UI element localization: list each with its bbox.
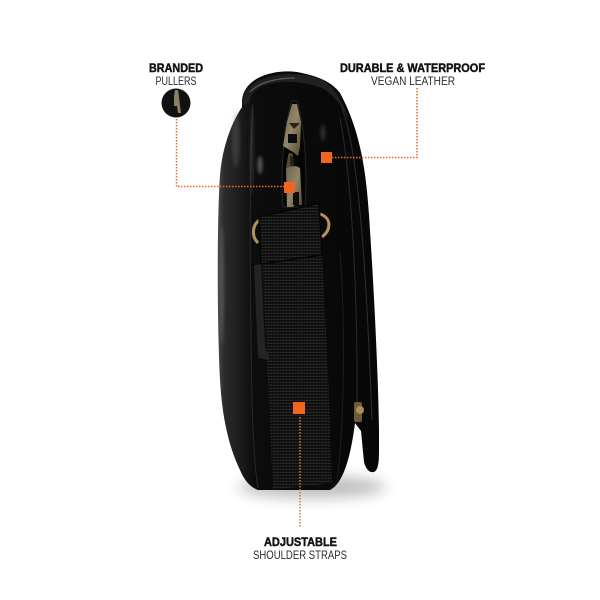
right D-ring	[320, 214, 329, 237]
zipper slot	[282, 101, 306, 207]
bag body silhouette	[218, 71, 379, 490]
strap main webbing	[262, 255, 332, 490]
ground shadow	[238, 476, 386, 498]
connector line	[331, 88, 417, 158]
body seams	[250, 105, 372, 488]
callout: branded pullers	[149, 61, 295, 193]
strap frayed highlight	[254, 264, 269, 360]
left D-ring	[253, 219, 261, 243]
flap highlight	[250, 78, 295, 92]
marker	[293, 402, 305, 414]
subheading: SHOULDER STRAPS	[253, 548, 347, 562]
strap buckle band	[259, 203, 322, 264]
snap button	[354, 402, 364, 422]
lower zip puller	[286, 153, 302, 207]
icon: zipper puller thumbnail	[162, 88, 190, 118]
connector line	[176, 119, 285, 186]
bag	[218, 71, 379, 490]
marker	[284, 182, 295, 193]
upper zip puller	[283, 104, 301, 156]
callout: adjustable shoulder straps	[253, 402, 347, 562]
heading: DURABLE & WATERPROOF	[340, 61, 485, 75]
heading: BRANDED	[149, 61, 203, 75]
marker	[321, 152, 332, 163]
subheading: VEGAN LEATHER	[371, 74, 455, 88]
callout: durable vegan leather	[321, 61, 485, 163]
subheading: PULLERS	[156, 74, 196, 88]
flap top edge	[243, 74, 352, 128]
heading: ADJUSTABLE	[264, 535, 337, 549]
leather highlights	[220, 105, 326, 345]
connector line	[299, 417, 301, 528]
